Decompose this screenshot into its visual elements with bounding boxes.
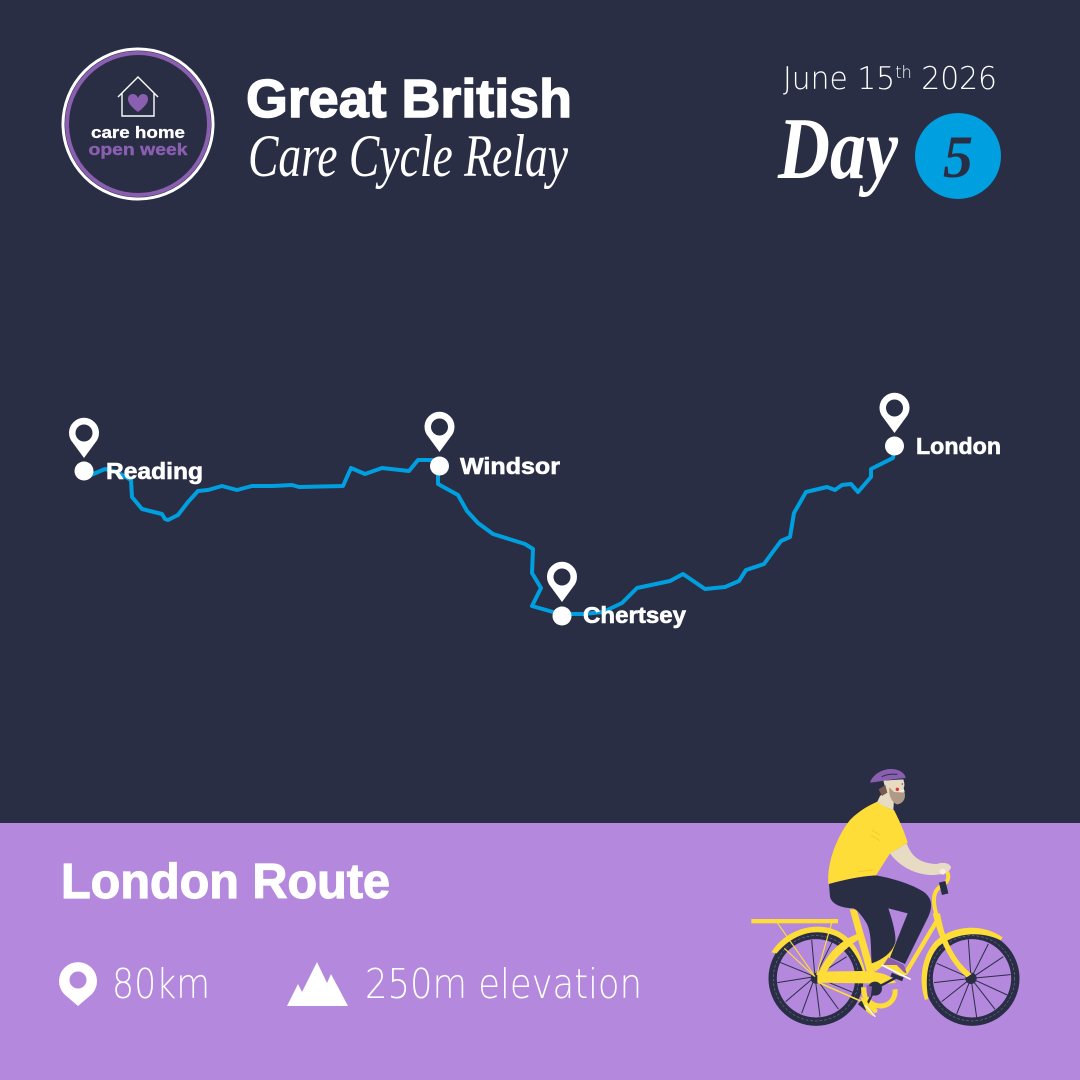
- stop: Reading: [69, 418, 203, 484]
- logo: care home open week: open week: [88, 140, 188, 159]
- stop: Windsor: [425, 412, 560, 479]
- cyclist illustration: [751, 769, 1015, 1022]
- logo: care home open week: [63, 49, 213, 199]
- title: Great British: [246, 69, 572, 129]
- distance stat: [59, 960, 210, 1008]
- rear wheel: [773, 935, 859, 1022]
- stop: Chertsey: Chertsey: [583, 602, 686, 628]
- date: [783, 61, 997, 97]
- stop: London: London: [916, 433, 1001, 459]
- stop: London: [880, 393, 1001, 459]
- day badge: 5: [943, 124, 973, 190]
- head: [870, 769, 906, 810]
- date: 2026: [912, 61, 997, 97]
- title: Care Cycle Relay: [248, 123, 568, 189]
- distance stat: 80km: [112, 960, 210, 1008]
- stop: Chertsey: [547, 562, 686, 628]
- arm: [890, 843, 951, 875]
- stop: Windsor: Windsor: [460, 453, 560, 479]
- elevation stat: 250m elevation: [365, 960, 642, 1008]
- bottom panel: [0, 823, 1080, 1080]
- title: [246, 69, 572, 189]
- elevation stat: [287, 960, 642, 1008]
- stop: Reading: Reading: [106, 458, 203, 484]
- route heading: London Route: [61, 855, 390, 909]
- date: th: [895, 63, 912, 83]
- day badge: Day: [777, 101, 899, 198]
- fenders and rack: [751, 919, 1003, 1000]
- day badge: [777, 101, 1001, 199]
- logo: care home open week: care home: [91, 123, 185, 142]
- front wheel: [929, 935, 1015, 1022]
- shirt: [828, 802, 908, 884]
- date: June 15: [783, 61, 900, 97]
- trousers: [829, 875, 931, 964]
- hand: [940, 869, 946, 875]
- crank and pedals: [858, 881, 948, 1017]
- frame: [817, 873, 972, 1011]
- route line: [84, 450, 894, 614]
